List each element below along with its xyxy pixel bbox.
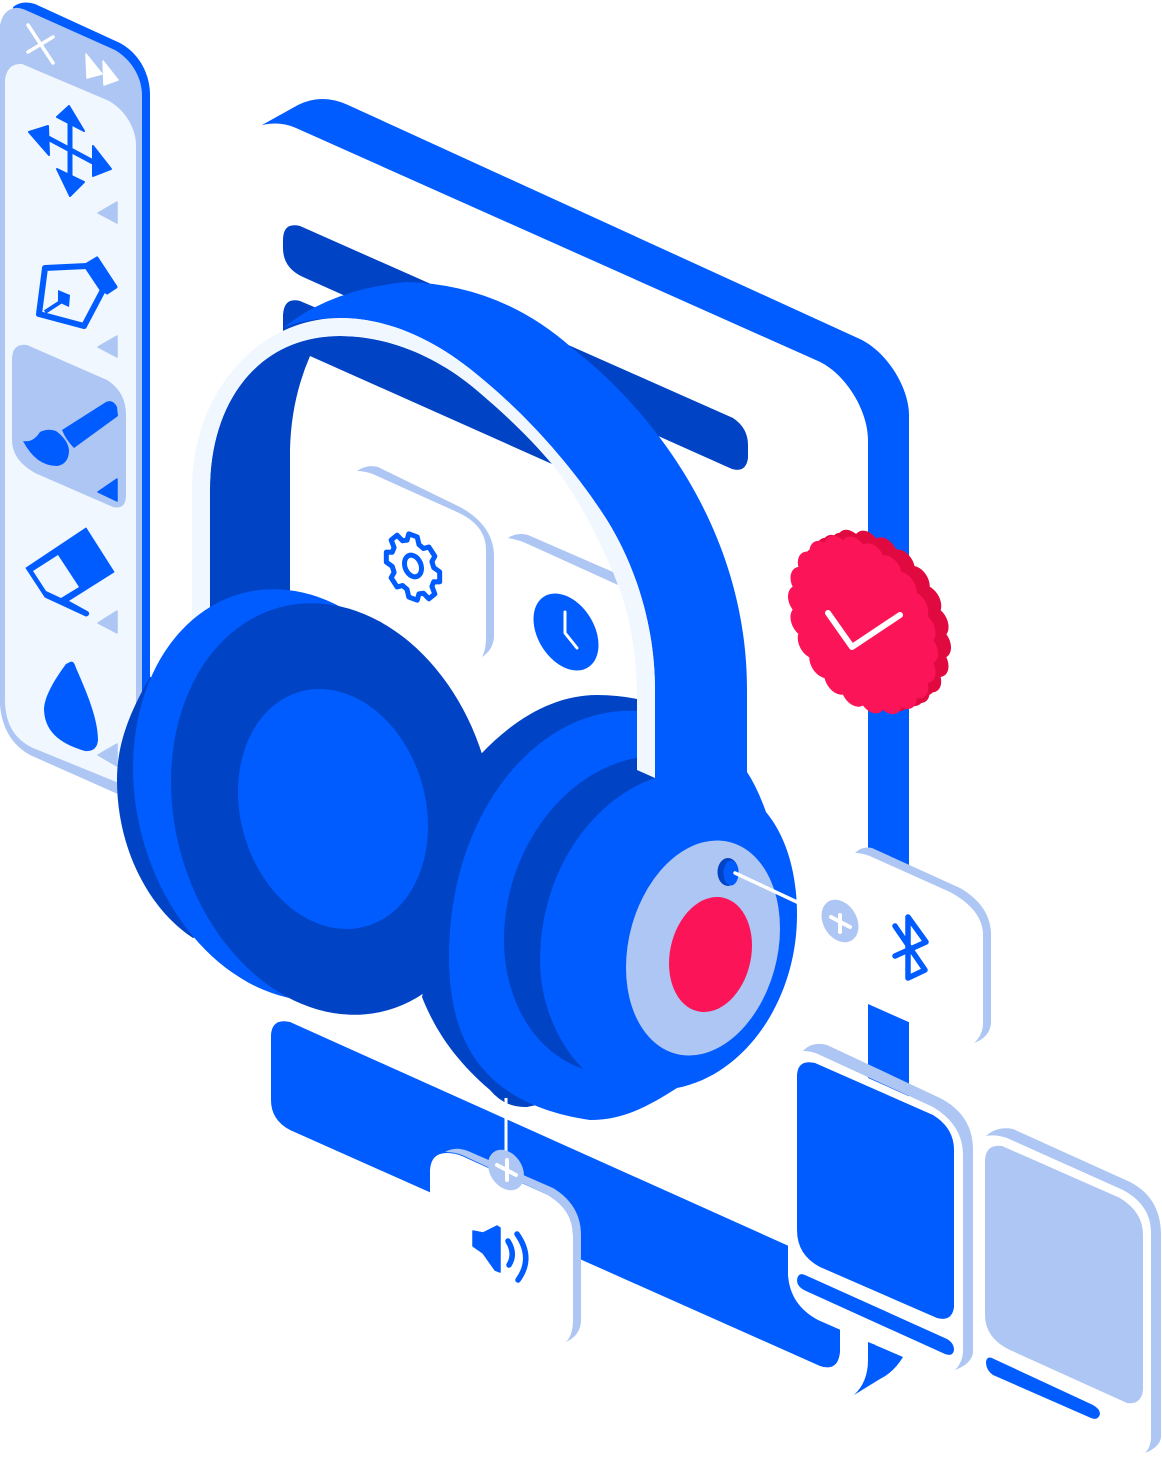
ear cup: left (117, 564, 495, 1040)
jack socket (718, 858, 738, 886)
card: light thumbnail (985, 1128, 1161, 1453)
headband pale rim (192, 318, 655, 778)
card: clock (508, 534, 618, 681)
headband end (637, 690, 655, 778)
badge: verified check (801, 526, 938, 718)
connector line: speaker (504, 1098, 508, 1155)
icon: paint brush (23, 401, 118, 466)
ear cup: right (422, 690, 797, 1120)
icon: gear (386, 526, 440, 608)
icon: eraser (26, 528, 114, 616)
cushion shadow (504, 758, 655, 1069)
card: settings (357, 466, 494, 657)
white screen area inside headband (290, 356, 637, 760)
tool corner markers (98, 202, 117, 766)
headband (192, 282, 747, 780)
icon: speaker (473, 1226, 526, 1280)
icon: plus button (488, 1145, 524, 1195)
icon: move arrows (29, 106, 111, 196)
icon: water drop (44, 662, 98, 751)
connector line (735, 873, 797, 902)
screen content bars (283, 225, 748, 470)
icon: clock (534, 583, 598, 681)
icon: close cross (28, 25, 53, 63)
headband inner shadow (210, 336, 552, 620)
record button (669, 889, 752, 1020)
outer disc (626, 823, 780, 1073)
panel: tool palette (0, 3, 150, 795)
card: volume (430, 1145, 581, 1345)
icon: check mark (828, 613, 900, 647)
panel: device frame (262, 99, 909, 1395)
icon: bluetooth (895, 917, 926, 978)
card: blue thumbnail (788, 1044, 973, 1380)
selected tool highlight (12, 345, 126, 508)
panel: screen bottom band (271, 1021, 840, 1367)
icon: plus button (822, 895, 858, 947)
icon: pen tool (39, 258, 116, 326)
card: bluetooth (822, 848, 991, 1055)
icon: fast forward (86, 54, 118, 85)
